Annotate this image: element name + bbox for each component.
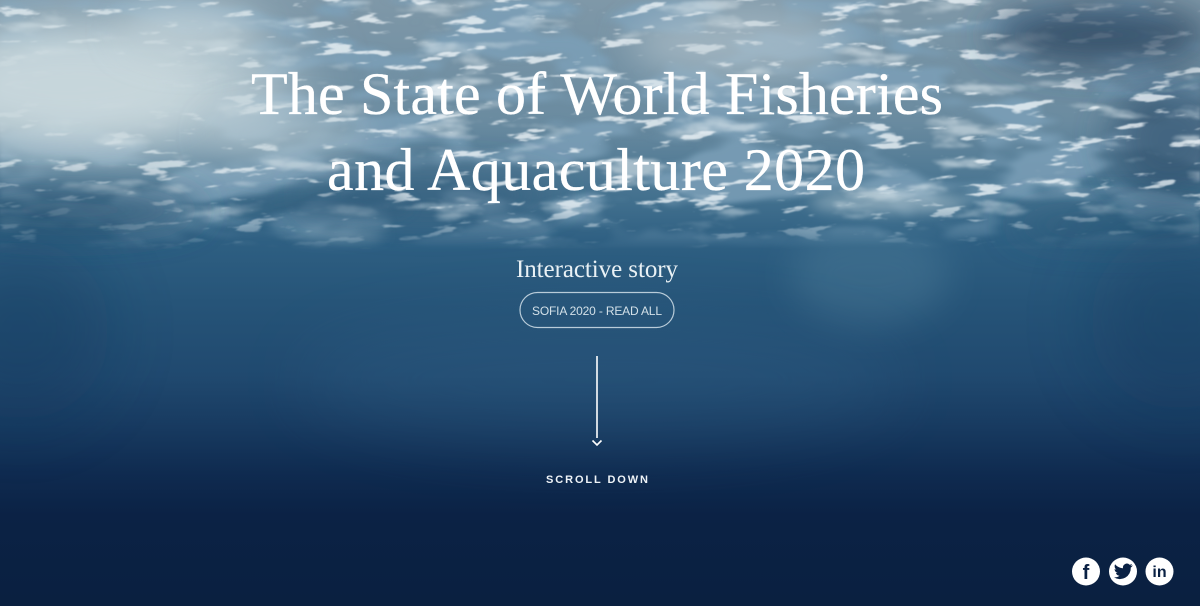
icon: facebook: f bbox=[1083, 562, 1090, 584]
title bbox=[251, 61, 943, 203]
social icons bbox=[1072, 558, 1174, 586]
icon: linkedin: in bbox=[1152, 564, 1167, 581]
title: The State of World Fisheries bbox=[251, 61, 943, 127]
button: SOFIA 2020 - READ ALL bbox=[520, 292, 674, 328]
icon: twitter bbox=[1109, 558, 1137, 586]
arrow: scroll down bbox=[592, 356, 602, 445]
label: scroll down: SCROLL DOWN bbox=[546, 474, 648, 486]
button: SOFIA 2020 - READ ALL: SOFIA 2020 - READ ALL bbox=[532, 304, 662, 318]
title: and Aquaculture 2020 bbox=[327, 137, 865, 203]
subtitle: Interactive story bbox=[516, 256, 678, 283]
